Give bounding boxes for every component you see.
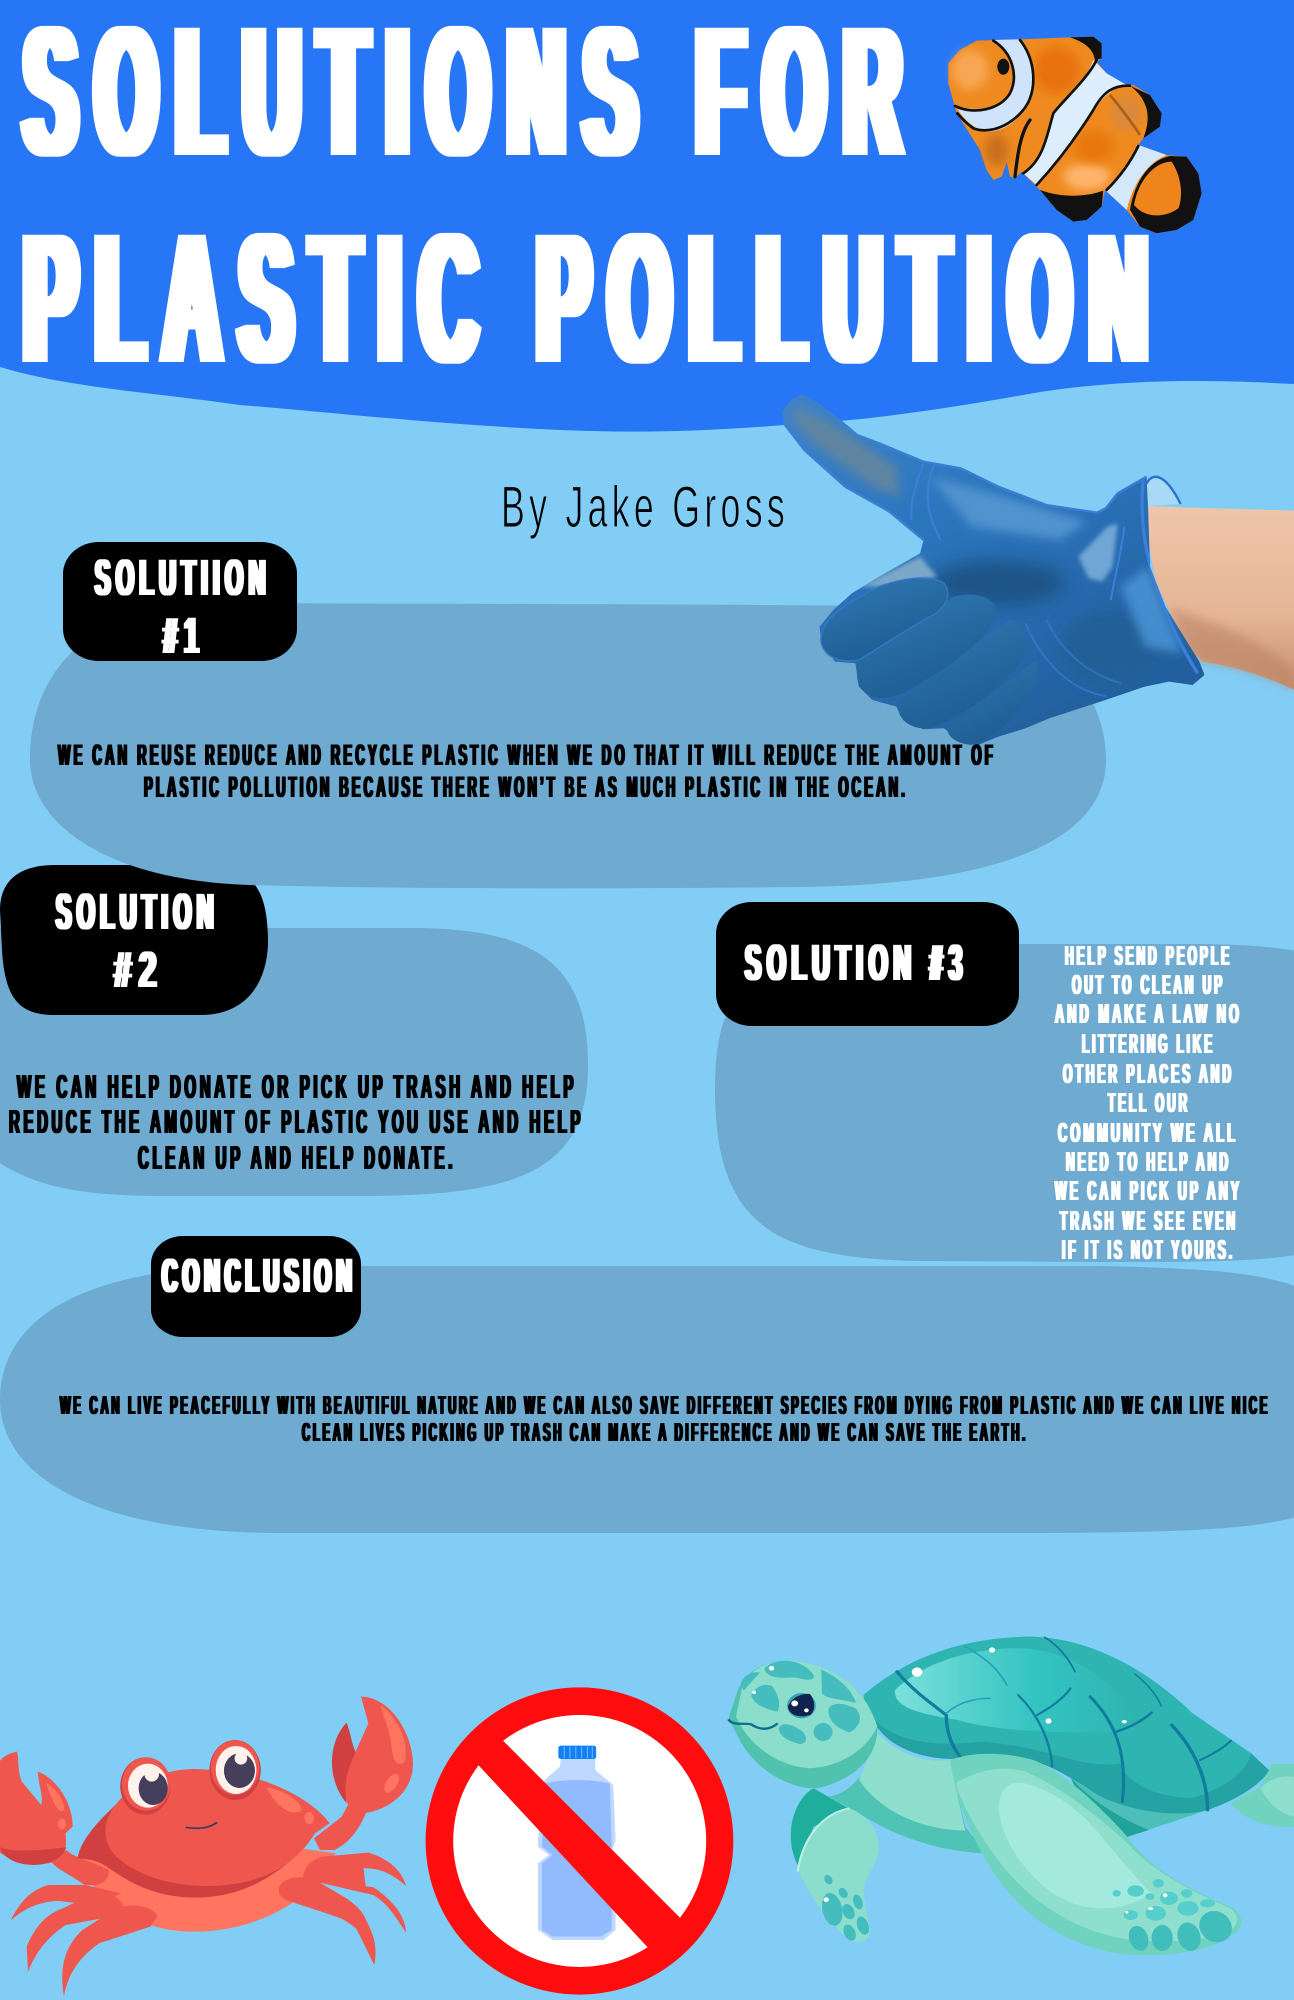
- text: WE CAN HELP DONATE OR PICK UP TRASH AND HELP: [17, 1068, 577, 1105]
- badge: solution 2: #2: [114, 941, 164, 998]
- big flipper: [950, 1754, 1242, 1955]
- text: solution 2: CLEAN UP AND HELP DONATE.: [138, 1139, 456, 1176]
- panel: conclusion: [0, 1266, 1294, 1533]
- tail flipper: [1230, 1764, 1294, 1827]
- crab right claw: [314, 1805, 366, 1850]
- under shell: [1071, 1778, 1208, 1837]
- crab dark shell: [78, 1800, 293, 1898]
- crab lower shell: [80, 1833, 335, 1932]
- badge: conclusion: [151, 1236, 361, 1337]
- front flipper: [798, 1808, 879, 1942]
- badge: solution 1: [63, 542, 297, 664]
- bottle: [538, 1746, 616, 1940]
- small flipper back: [791, 1788, 852, 1867]
- icon: clownfish: [948, 37, 1202, 233]
- crab eyes: [120, 1757, 171, 1815]
- badge: solution 1: #1: [163, 607, 205, 664]
- icon: crab: [0, 1697, 413, 1997]
- shell: [864, 1637, 1269, 1813]
- crab head: [105, 1769, 330, 1886]
- panel: solution 3: [715, 944, 1294, 1262]
- panel: solution 1: [30, 603, 1106, 888]
- text: conclusion: [60, 1390, 1270, 1447]
- badge: solution 3: SOLUTION #3: [745, 934, 968, 991]
- author byline: By Jake Gross: [501, 475, 789, 540]
- icon: no plastic bottle sign: [426, 1687, 733, 1995]
- badge: solution 1: SOLUTIION: [95, 549, 271, 606]
- panel: solution 2: [0, 928, 588, 1196]
- head: [728, 1661, 877, 1788]
- icon: gloved thumbs up: [782, 395, 1294, 745]
- badge: solution 2: [0, 865, 268, 1015]
- crab left claw: [0, 1752, 73, 1864]
- text: solution 2: [9, 1068, 584, 1176]
- text: REDUCE THE AMOUNT OF PLASTIC YOU USE AND HELP: [9, 1103, 584, 1140]
- badge: solution 2: SOLUTION: [56, 883, 219, 940]
- header wave: [0, 0, 1294, 432]
- text: solution 3: [1055, 940, 1242, 1265]
- text: solution 1: [58, 739, 996, 804]
- body: [829, 1733, 986, 1853]
- icon: sea turtle: [728, 1637, 1294, 1955]
- badge: solution 3: [716, 902, 1019, 1026]
- text: CONCLUSION: [162, 1250, 357, 1303]
- title: [24, 0, 1166, 402]
